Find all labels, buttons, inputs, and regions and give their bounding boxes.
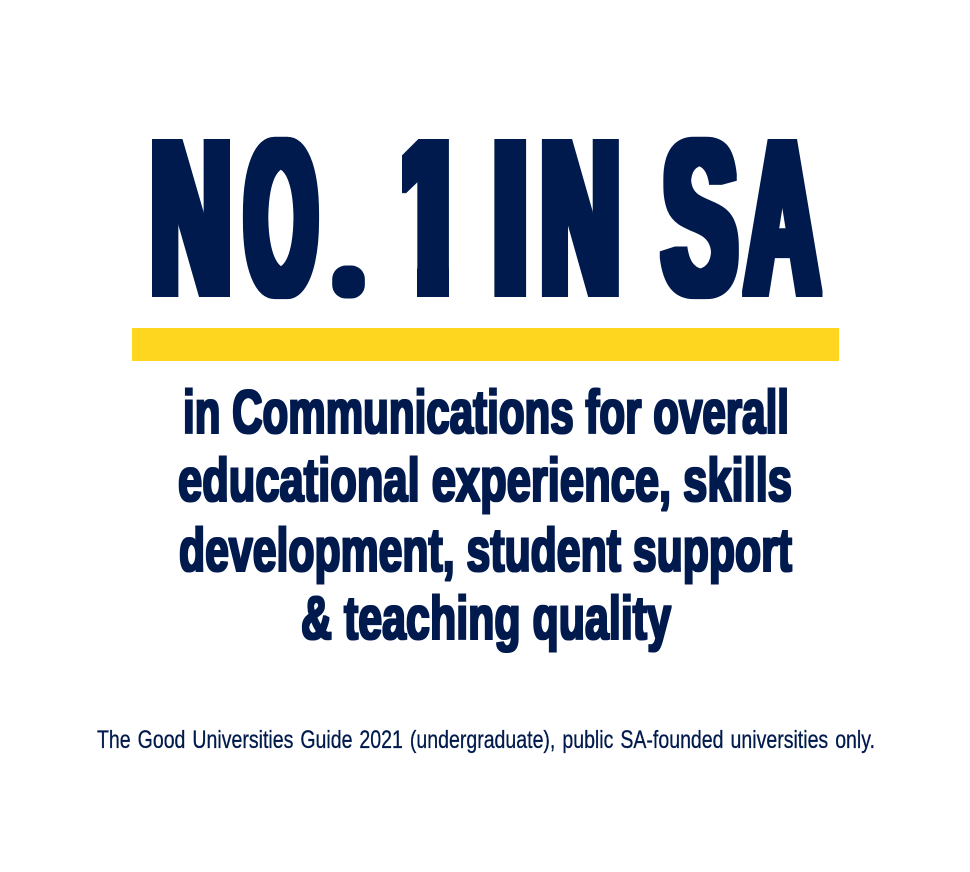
title: I	[491, 94, 529, 341]
title	[152, 136, 822, 300]
yellow bar	[132, 328, 839, 361]
title: S	[662, 95, 737, 342]
title: N	[540, 95, 620, 342]
title: O	[245, 94, 317, 341]
description text	[178, 378, 792, 652]
title: .	[343, 250, 354, 294]
description text: & teaching quality	[301, 584, 671, 652]
title: 1	[390, 96, 469, 342]
infographic	[97, 136, 874, 754]
title: N	[150, 95, 232, 342]
title: A	[746, 95, 819, 342]
